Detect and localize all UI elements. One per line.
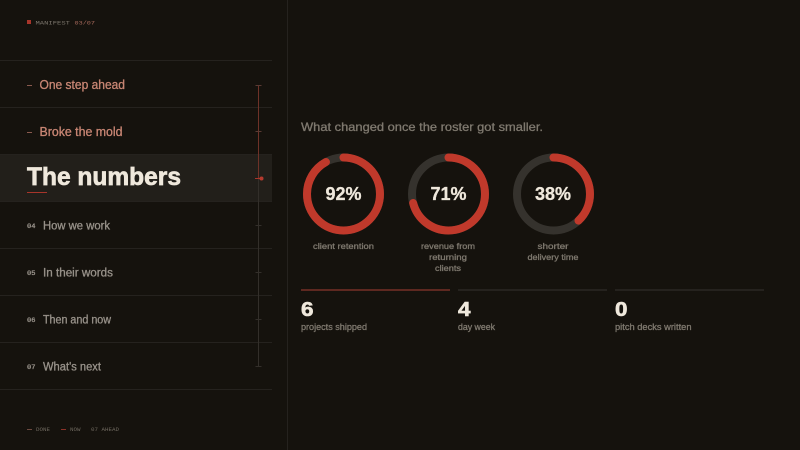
donut: 38% shorter delivery time: delivery time [528, 252, 579, 262]
donut: 38% shorter delivery time: shorter [538, 241, 569, 251]
stat: 6 projects shipped: 6 [301, 299, 314, 321]
stat: 6 projects shipped: projects shipped [301, 322, 367, 332]
header: manifest label: MANIFEST [36, 20, 71, 26]
donut: 71% revenue from returning clients: revenue from [421, 241, 475, 251]
stat: 4 day week: day week [458, 322, 495, 332]
nav item: How we work: 04 [27, 223, 36, 230]
stat: 6 projects shipped [301, 289, 450, 332]
subtitle: What changed once the roster got smaller. [301, 120, 543, 134]
legend: DONE [36, 427, 50, 433]
donut: 38% shorter delivery time: 38% [535, 184, 571, 204]
header: manifest label: 03/07 [74, 20, 95, 26]
donut: 92% client retention: client retention [313, 241, 374, 251]
nav item: Then and now: Then and now [43, 314, 112, 326]
stat: 0 pitch decks written: 0 [615, 299, 628, 321]
progress timeline [255, 85, 264, 367]
donut: 92% client retention: 92% [326, 184, 362, 204]
nav item: In their words: In their words [43, 268, 113, 280]
donut: 71% revenue from returning clients: returning [429, 252, 467, 262]
nav item: In their words: 05 [27, 270, 36, 277]
donut: 71% revenue from returning clients [412, 158, 485, 273]
nav item: The numbers (active): The numbers [27, 163, 181, 191]
stat: 0 pitch decks written: pitch decks written [615, 322, 692, 332]
donut: 71% revenue from returning clients: 71% [430, 184, 466, 204]
stat: 4 day week: 4 [458, 299, 471, 321]
header: manifest label [27, 20, 95, 26]
nav item: Broke the mold: Broke the mold [40, 125, 123, 139]
legend: NOW [70, 427, 80, 433]
donut: 38% shorter delivery time [517, 158, 590, 262]
legend [27, 427, 119, 433]
legend: 07 AHEAD [91, 427, 119, 433]
navigation list [0, 60, 272, 390]
donut: 71% revenue from returning clients: clients [435, 263, 461, 273]
nav item: What's next: 07 [27, 364, 36, 371]
nav item: Then and now: 06 [27, 317, 36, 324]
nav item: How we work: How we work [43, 220, 110, 232]
stat: 0 pitch decks written [615, 289, 764, 332]
donut: 92% client retention [307, 158, 380, 251]
stat: 4 day week [458, 289, 607, 332]
nav item: What's next: What's next [43, 362, 102, 374]
nav item: One step ahead: One step ahead [40, 78, 125, 92]
